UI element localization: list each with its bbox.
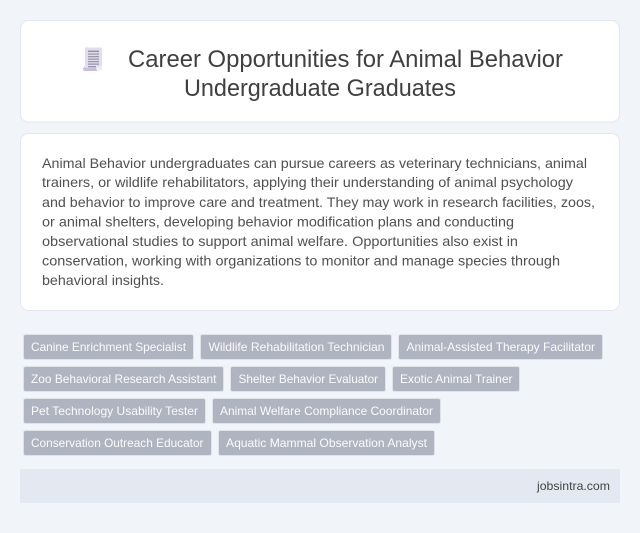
panel: description [20, 134, 620, 310]
tag: Animal-Assisted Therapy Facilitator [406, 340, 595, 354]
tag [218, 430, 434, 456]
footer bar [20, 469, 620, 503]
description text: and behavior to improve care and treatment. They may work in research facilities, zoos, [42, 194, 595, 210]
description text: Animal Behavior undergraduates can pursue careers as veterinary technicians, animal [42, 155, 587, 171]
tag [200, 334, 392, 360]
panel: header [20, 20, 620, 122]
tag: Zoo Behavioral Research Assistant [31, 372, 217, 386]
description text: trainers, or wildlife rehabilitators, applying their understanding of animal psychology [42, 174, 573, 190]
title: Undergraduate Graduates [184, 75, 456, 102]
tag: Shelter Behavior Evaluator [238, 372, 378, 386]
tag: Animal Welfare Compliance Coordinator [220, 404, 433, 418]
icon: document scroll [83, 48, 102, 71]
tag [230, 366, 386, 392]
tag: Pet Technology Usability Tester [31, 404, 198, 418]
tag [24, 334, 194, 360]
tag: Conservation Outreach Educator [31, 436, 204, 450]
tag [212, 398, 440, 424]
tag: Canine Enrichment Specialist [31, 340, 187, 354]
description text: or animal shelters, developing behavior modification plans and conducting [42, 214, 514, 230]
description text: behavioral insights. [42, 272, 164, 288]
tag [24, 366, 224, 392]
tag: Aquatic Mammal Observation Analyst [226, 436, 428, 450]
description text: observational studies to support animal welfare. Opportunities also exist in [42, 233, 518, 249]
description text: conservation, working with organizations to monitor and manage species through [42, 252, 560, 268]
tag: Wildlife Rehabilitation Technician [208, 340, 384, 354]
title: Career Opportunities for Animal Behavior [128, 46, 563, 73]
tag [398, 334, 602, 360]
title [128, 46, 563, 102]
tag: Exotic Animal Trainer [400, 372, 512, 386]
tag [24, 430, 212, 456]
tag [392, 366, 520, 392]
panel: career tags [24, 334, 602, 456]
description text [42, 155, 595, 288]
tag [24, 398, 206, 424]
footer text: jobsintra.com [536, 479, 610, 493]
